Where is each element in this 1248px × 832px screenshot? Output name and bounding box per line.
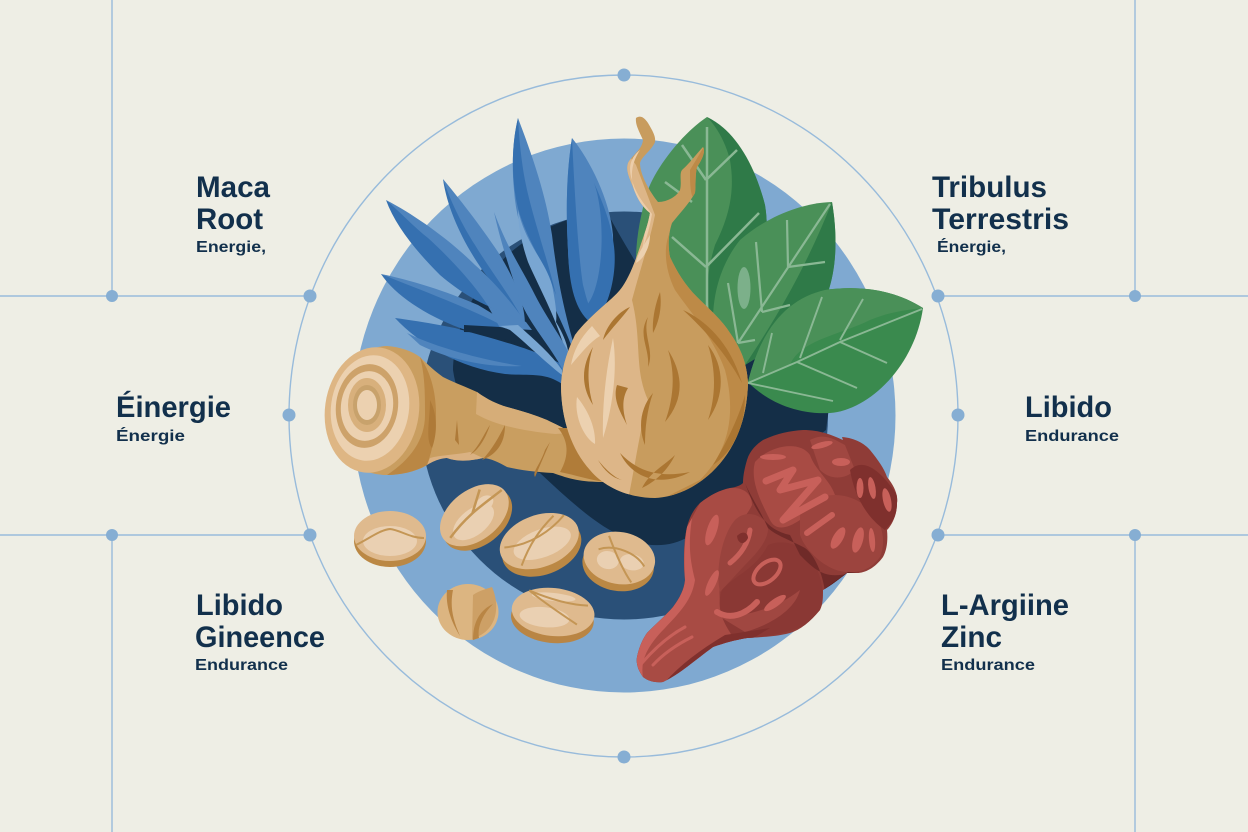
- root cut face: [317, 341, 436, 479]
- icon: blue leaves: [381, 118, 615, 384]
- label: L-Argiine Zinc: L-Argiine: [941, 589, 1069, 622]
- icon: maca root: [317, 341, 605, 482]
- central disc: [352, 138, 896, 692]
- label: Libido right: [1025, 391, 1119, 445]
- lower lobe strokes: [642, 530, 785, 665]
- leaf two: [713, 202, 836, 365]
- label: L-Argiine Zinc: [941, 589, 1069, 674]
- bulb furrows: [584, 292, 745, 488]
- label: Libido Gineence: Libido: [196, 589, 283, 622]
- label: Éinergie: Énergie: [116, 426, 185, 445]
- lower left lobe and foot: [630, 488, 752, 690]
- slice six: [509, 584, 597, 647]
- leaf three: [748, 288, 923, 413]
- stem highlight: [630, 150, 652, 250]
- label: Maca Root: [196, 171, 270, 256]
- walnut lens marks: [702, 439, 893, 614]
- label: L-Argiine Zinc: Endurance: [941, 657, 1035, 674]
- label: Tribulus Terrestris: [932, 171, 1069, 256]
- label: Tribulus Terrestris: Tribulus: [932, 171, 1047, 204]
- left edge highlight: [637, 518, 695, 677]
- label: Libido Gineence: Gineence: [195, 621, 325, 654]
- label: Libido Gineence: Endurance: [195, 657, 288, 674]
- upper lobes: [754, 446, 835, 528]
- middle lobes: [718, 514, 768, 592]
- label: Libido right: Libido: [1025, 391, 1112, 424]
- label: Maca Root: Maca: [196, 171, 270, 204]
- slice five: [438, 584, 498, 640]
- label: Libido Gineence: [195, 589, 325, 674]
- icon: green leaves: [636, 117, 923, 413]
- label: Tribulus Terrestris: Terrestris: [932, 203, 1069, 236]
- leaf one: [636, 117, 767, 330]
- slice one: [354, 511, 426, 567]
- creases: [745, 483, 850, 592]
- label: Maca Root: Energie,: [196, 239, 266, 256]
- icon: root slices: [354, 472, 659, 647]
- icon: maca bulb: [561, 116, 748, 498]
- connector nodes: [106, 68, 1141, 764]
- slice two: [428, 472, 524, 564]
- slice four: [578, 526, 659, 597]
- foot shadow: [665, 628, 770, 682]
- icon: red tuber: [630, 430, 900, 690]
- dark right band: [666, 148, 748, 496]
- slice three: [492, 503, 589, 587]
- label: Tribulus Terrestris: Énergie,: [937, 237, 1006, 256]
- bulb highlights: [571, 235, 650, 444]
- label: Maca Root: Root: [196, 203, 263, 236]
- label: Éinergie: [116, 390, 231, 445]
- light left side: [561, 158, 655, 494]
- label: Libido right: Endurance: [1025, 428, 1119, 445]
- walnut zigzag highlight: [766, 470, 825, 520]
- label: L-Argiine Zinc: Zinc: [941, 621, 1002, 654]
- label: Éinergie: Éinergie: [116, 390, 231, 424]
